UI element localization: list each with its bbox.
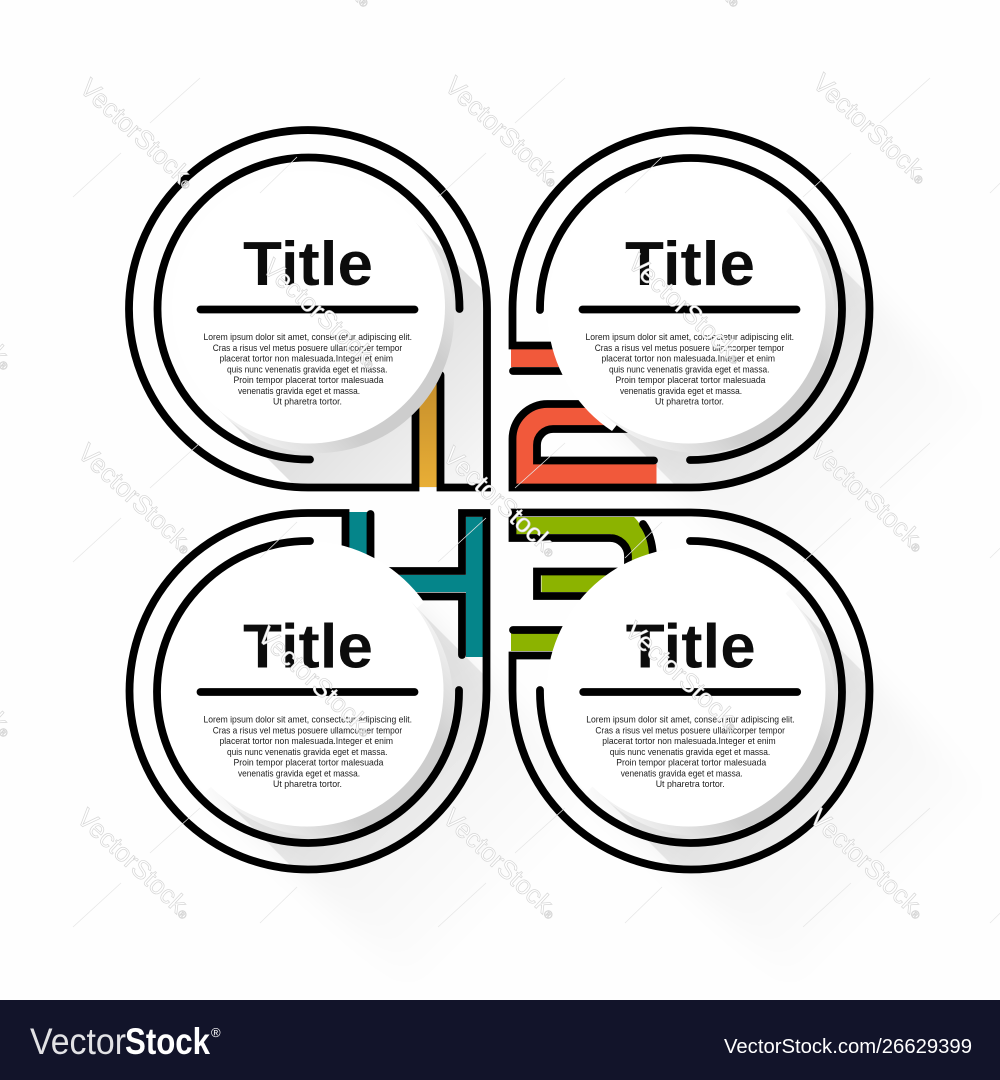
body text: placerat tortor non malesuada.Integer et enim <box>220 736 393 746</box>
watermarks: VectorStock® <box>807 67 935 189</box>
rule <box>582 306 796 313</box>
body text: Cras a risus vel metus posuere ullamcorper tempor <box>595 343 784 353</box>
footer logo <box>30 1021 221 1062</box>
watermarks: VectorStock® <box>439 70 567 192</box>
body text <box>586 714 795 789</box>
white disc <box>172 170 445 444</box>
rule <box>200 306 414 313</box>
body text: Lorem ipsum dolor sit amet, consectetur adipiscing elit. <box>586 332 794 342</box>
disc crescent shadow <box>182 181 454 453</box>
gold connector band <box>419 375 437 487</box>
inner ring <box>540 158 842 460</box>
body text: Lorem ipsum dolor sit amet, consectetur adipiscing elit. <box>204 332 412 342</box>
footer logo: Stock <box>125 1021 210 1062</box>
footer url: VectorStock.com/26629399 <box>724 1036 972 1058</box>
white disc <box>552 170 826 444</box>
watermarks: VectorStock® <box>622 247 750 369</box>
body text: Proin tempor placerat tortor malesuada <box>616 375 766 385</box>
teal connector bands <box>349 512 483 657</box>
white cut-out over bands <box>547 165 792 431</box>
panel: bottom-right circle <box>511 512 870 870</box>
body text: venenatis gravida eget et massa. <box>238 768 360 778</box>
body text: Lorem ipsum dolor sit amet, consectetur adipiscing elit. <box>586 714 795 724</box>
body text: Ut pharetra tortor. <box>273 397 342 407</box>
green band inner strokes <box>513 524 653 630</box>
body text: Ut pharetra tortor. <box>273 779 342 789</box>
watermarks: VectorStock® <box>619 615 747 737</box>
body text: Lorem ipsum dolor sit amet, consectetur adipiscing elit. <box>204 714 412 724</box>
long drop shadows <box>211 211 985 986</box>
white disc <box>170 554 444 826</box>
watermarks: VectorStock® <box>804 435 932 557</box>
white cut-out over bands <box>546 547 792 792</box>
body text: quis nunc venenatis gravida eget et massa. <box>227 747 388 757</box>
content: title, rule, text <box>582 230 796 407</box>
content: title, rule, text <box>583 612 797 789</box>
body text: venenatis gravida eget et massa. <box>620 386 742 396</box>
body text: quis nunc venenatis gravida eget et massa. <box>227 364 388 374</box>
body text: placerat tortor non malesuada.Integer et enim <box>602 354 775 364</box>
content: title, rule, text <box>200 230 414 407</box>
watermarks: VectorStock® <box>437 440 565 562</box>
watermarks: VectorStock® <box>74 72 202 194</box>
outer outline with tab <box>129 130 487 488</box>
body text: Ut pharetra tortor. <box>655 397 724 407</box>
white cut-out over bands <box>159 541 424 792</box>
rule <box>583 688 797 696</box>
body text: venenatis gravida eget et massa. <box>621 768 743 778</box>
body text: venenatis gravida eget et massa. <box>238 386 360 396</box>
white disc <box>552 554 826 826</box>
panel: bottom-left circle <box>130 512 486 870</box>
body text: Cras a risus vel metus posuere ullamcorper tempor <box>213 343 402 353</box>
watermarks: VectorStock® <box>437 802 565 924</box>
inner ring <box>157 541 459 843</box>
watermarks: VectorStock® <box>252 620 380 742</box>
body text: Cras a risus vel metus posuere ullamcorper tempor <box>213 725 402 735</box>
watermarks: VectorStock® <box>71 802 199 924</box>
green connector bands <box>511 517 651 651</box>
watermarks: VectorStock® <box>257 252 385 374</box>
body text: quis nunc venenatis gravida eget et massa. <box>609 364 770 374</box>
body text <box>204 332 412 407</box>
body text <box>204 714 412 789</box>
body text: placerat tortor non malesuada.Integer et enim <box>220 354 393 364</box>
inner ring <box>540 541 842 843</box>
title: Title <box>626 612 756 682</box>
outer outline with tab <box>130 513 486 870</box>
disc crescent shadow <box>563 181 835 453</box>
footer logo: Vector <box>30 1021 126 1062</box>
red band inner strokes <box>513 371 654 460</box>
footer bar <box>0 1000 1000 1080</box>
watermarks: VectorStock® <box>804 802 932 924</box>
disc crescent shadow <box>181 564 453 836</box>
body text: Proin tempor placerat tortor malesuada <box>616 758 767 768</box>
title: Title <box>625 230 755 299</box>
footer logo: ® <box>211 1025 221 1040</box>
content: title, rule, text <box>200 612 414 789</box>
body text: Proin tempor placerat tortor malesuada <box>234 375 384 385</box>
watermarks: VectorStock® <box>72 437 200 559</box>
outer outline with tab <box>512 512 870 870</box>
body text: Cras a risus vel metus posuere ullamcorper tempor <box>595 725 785 735</box>
panel: top-left circle <box>129 130 487 488</box>
body text: Proin tempor placerat tortor malesuada <box>234 758 384 768</box>
body text: Ut pharetra tortor. <box>656 779 725 789</box>
outer outline with tab <box>512 130 870 488</box>
rule <box>200 688 414 696</box>
inner ring <box>158 158 460 460</box>
body text: placerat tortor non malesuada.Integer et enim <box>602 736 776 746</box>
teal band inner stroke <box>367 514 374 570</box>
panel: top-right circle <box>511 130 870 488</box>
title: Title <box>243 230 373 299</box>
red connector bands <box>511 349 656 484</box>
body text <box>586 332 794 407</box>
body text: quis nunc venenatis gravida eget et massa. <box>610 747 770 757</box>
disc crescent shadow <box>563 564 835 836</box>
title: Title <box>243 612 373 682</box>
